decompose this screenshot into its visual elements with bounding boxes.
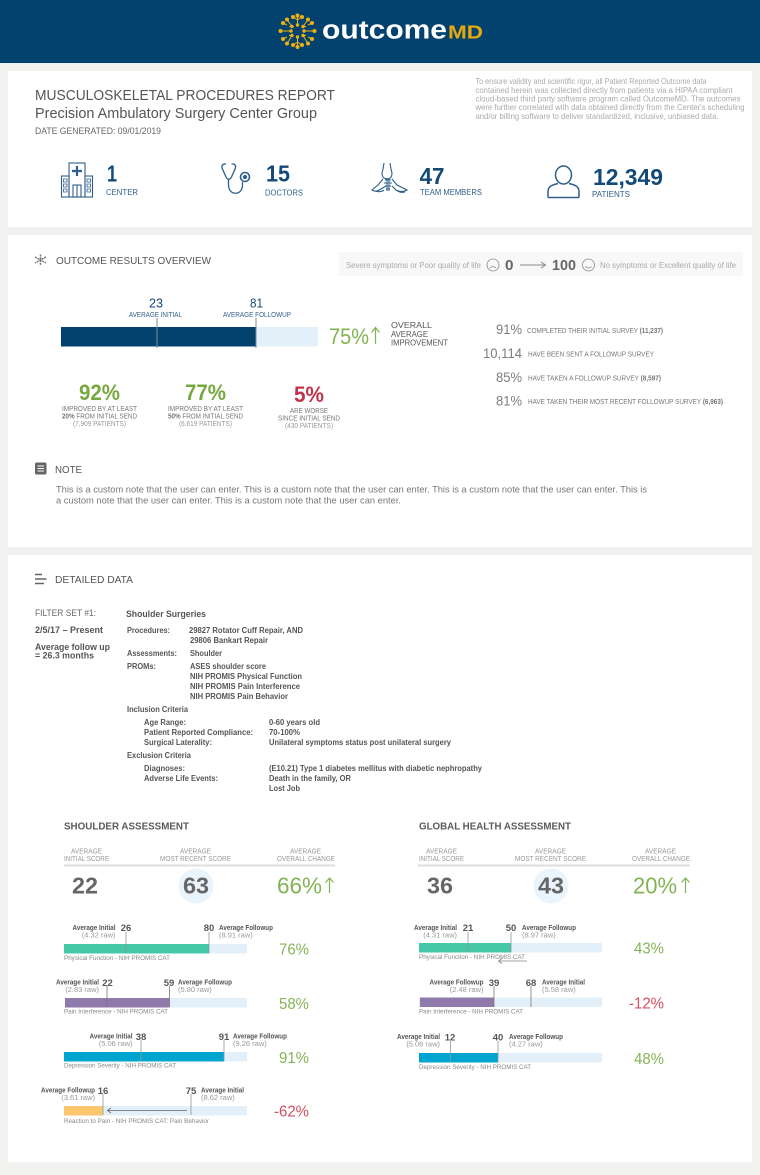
bar: shoulder depression severity: Depression Severity - NIH PROMIS CAT xyxy=(64,1062,176,1070)
bar: global depression severity: 48% xyxy=(634,1051,664,1068)
global health assessment summary: MOST RECENT SCORE xyxy=(515,856,586,863)
logo wordmark: MD xyxy=(448,22,483,42)
filter set summary: 2/5/17 – Present xyxy=(35,625,104,636)
survey statistics: HAVE BEEN SENT A FOLLOWUP SURVEY xyxy=(528,352,654,358)
bar: shoulder depression severity: Average Initial xyxy=(90,1034,133,1040)
global health assessment summary: 36 xyxy=(427,872,453,898)
stat: 5 percent worse xyxy=(278,382,340,430)
bar: shoulder depression severity: (9.26 raw) xyxy=(233,1039,267,1048)
stat: 92 percent improved: (7,909 PATIENTS) xyxy=(73,421,126,428)
bar: shoulder reaction to pain xyxy=(41,1086,309,1125)
logo icon: gold radial network xyxy=(279,14,316,48)
bar: shoulder depression severity: Average Followup xyxy=(233,1034,287,1040)
overall progress bar: 81 xyxy=(250,296,263,310)
survey statistics: HAVE TAKEN A FOLLOWUP SURVEY (8,597) xyxy=(528,376,661,382)
bar: global physical function: (8.97 raw) xyxy=(522,930,556,940)
filter details: 0-60 years old xyxy=(269,718,320,727)
scale legend: No symptoms or Excellent quality of life xyxy=(600,260,736,270)
global health assessment summary: OVERALL CHANGE xyxy=(632,856,690,863)
survey statistics: 81% xyxy=(496,392,522,408)
filter details: Unilateral symptoms status post unilateral surgery xyxy=(269,738,452,747)
bar: shoulder pain interference: Average Initial xyxy=(56,980,99,986)
filter details: Patient Reported Compliance: xyxy=(144,728,253,737)
bar: shoulder reaction to pain: (3.61 raw) xyxy=(61,1093,95,1102)
validity disclaimer: To ensure validity and scientific rigor, all Patient Reported Outcome data xyxy=(476,76,707,86)
bar: global physical function xyxy=(414,923,664,964)
bar: shoulder physical function: 26 xyxy=(121,923,131,934)
bar: shoulder depression severity: 91% xyxy=(279,1050,309,1067)
shoulder assessment summary: SHOULDER ASSESSMENT xyxy=(64,820,190,832)
icon: hospital xyxy=(62,163,92,197)
filter details: Surgical Laterality: xyxy=(144,738,212,747)
overall improvement: IMPROVEMENT xyxy=(391,338,448,348)
survey statistics xyxy=(483,321,723,408)
shoulder assessment summary: 22 xyxy=(72,872,98,898)
filter set summary: = 26.3 months xyxy=(35,650,94,662)
shoulder assessment summary: AVERAGE xyxy=(290,848,321,856)
filter details: ASES shoulder score xyxy=(190,662,267,671)
bar: global depression severity: (5.06 raw) xyxy=(406,1040,440,1048)
bar: global physical function: Physical Function - NIH PROMIS CAT xyxy=(419,954,525,961)
report title: MUSCULOSKELETAL PROCEDURES REPORT xyxy=(35,87,335,104)
shoulder assessment summary: INITIAL SCORE xyxy=(64,856,109,863)
validity disclaimer xyxy=(475,76,745,121)
global health assessment summary: AVERAGE xyxy=(426,848,457,856)
overall improvement: AVERAGE xyxy=(391,329,428,339)
report title: Precision Ambulatory Surgery Center Group xyxy=(35,105,317,122)
bar: shoulder reaction to pain: Average Followup xyxy=(41,1088,95,1094)
icon: list xyxy=(35,574,46,584)
overall progress bar: 23 xyxy=(149,296,163,310)
bar: shoulder physical function: (8.91 raw) xyxy=(219,930,253,940)
filter details: Assessments: xyxy=(127,649,177,658)
global health assessment summary: 20% xyxy=(633,872,677,898)
overall improvement: 75% xyxy=(329,324,369,349)
scale legend: Severe symptoms or Poor quality of life xyxy=(346,260,481,270)
filter details: Diagnoses: xyxy=(144,764,185,773)
icon: team hands xyxy=(372,163,407,192)
bar: shoulder pain interference: (5.80 raw) xyxy=(178,985,212,994)
bar: global pain interference: (2.48 raw) xyxy=(450,985,484,994)
scale legend: 100 xyxy=(552,258,576,274)
bar: global depression severity: Depression Severity - NIH PROMIS CAT xyxy=(419,1064,531,1071)
bar: global physical function: Average Followup xyxy=(522,925,576,932)
note text: a custom note that the user can enter. This is a custom note that the user can enter. xyxy=(56,496,401,506)
note text: This is a custom note that the user can enter. This is a custom note that the user can enter. This is a custom note that the user can enter. This is xyxy=(56,484,647,496)
survey statistics: HAVE TAKEN THEIR MOST RECENT FOLLOWUP SURVEY (6,963) xyxy=(528,399,723,406)
shoulder assessment summary: AVERAGE xyxy=(71,848,102,856)
shoulder assessment summary: MOST RECENT SCORE xyxy=(160,856,231,863)
bar: global physical function: 50 xyxy=(506,923,516,934)
filter details: NIH PROMIS Pain Interference xyxy=(190,682,301,691)
filter details: Lost Job xyxy=(269,784,300,793)
bar: shoulder pain interference xyxy=(56,978,309,1016)
stat: 77 percent improved: IMPROVED BY AT LEAST xyxy=(168,406,244,413)
bar: shoulder depression severity: 91 xyxy=(219,1032,230,1043)
stat: 92 percent improved: IMPROVED BY AT LEAST xyxy=(62,406,138,413)
filter details: Shoulder xyxy=(190,649,222,658)
global health assessment summary: AVERAGE xyxy=(535,848,566,856)
stat: centers xyxy=(106,160,138,197)
stat: team members: TEAM MEMBERS xyxy=(420,188,482,197)
icon: note xyxy=(35,462,46,474)
bar: global pain interference xyxy=(419,978,664,1016)
bar: global pain interference: -12% xyxy=(629,996,664,1012)
stat: doctors: 15 xyxy=(266,160,290,186)
bar: shoulder depression severity xyxy=(64,1032,309,1070)
heading: detailed data: DETAILED DATA xyxy=(55,574,133,586)
panel: report summary xyxy=(8,71,752,227)
stat: centers: 1 xyxy=(107,160,117,186)
validity disclaimer: contained herein was collected directly from patients via a HIPAA compliant xyxy=(476,85,733,95)
stat: patients: 12,349 xyxy=(593,164,663,190)
filter details: NIH PROMIS Physical Function xyxy=(190,672,302,681)
shoulder assessment summary: 63 xyxy=(183,872,209,898)
bar: shoulder pain interference: 22 xyxy=(102,978,113,989)
filter details: Exclusion Criteria xyxy=(127,751,192,760)
stat: doctors: DOCTORS xyxy=(265,188,303,198)
bar: shoulder pain interference: 59 xyxy=(164,978,174,989)
survey statistics: 10,114 xyxy=(483,345,522,361)
bar: shoulder physical function xyxy=(64,923,309,962)
filter details: Inclusion Criteria xyxy=(127,705,189,714)
heading: outcome results overview: OUTCOME RESULTS OVERVIEW xyxy=(56,255,211,267)
stat: 77 percent improved xyxy=(168,380,244,428)
stat: 92 percent improved: 20% FROM INITIAL SEND xyxy=(62,414,137,420)
stat: team members xyxy=(420,163,482,197)
bar: shoulder physical function: 80 xyxy=(204,923,214,934)
report title xyxy=(35,87,335,136)
stat: 92 percent improved: 92% xyxy=(79,380,120,405)
note text xyxy=(56,484,647,506)
filter details: Adverse Life Events: xyxy=(144,774,218,783)
logo wordmark: outcome xyxy=(322,16,447,44)
validity disclaimer: and/or billing software to deliver standardized, inclusive, unbiased data. xyxy=(476,111,718,121)
header banner xyxy=(0,0,760,63)
overall progress bar xyxy=(61,296,318,348)
scale legend: 0 xyxy=(505,258,514,274)
bar: global physical function: 21 xyxy=(463,923,474,934)
overall progress bar: AVERAGE INITIAL xyxy=(129,312,182,319)
filter details: PROMs: xyxy=(127,662,156,671)
stat: patients: PATIENTS xyxy=(592,190,630,199)
bar: shoulder reaction to pain: Reaction to Pain - NIH PROMIS CAT: Pain Behavior xyxy=(64,1118,210,1125)
filter details: (E10.21) Type 1 diabetes mellitus with diabetic nephropathy xyxy=(269,764,483,773)
survey statistics: 85% xyxy=(496,369,522,385)
filter set summary: Average follow up xyxy=(35,642,110,653)
survey statistics: COMPLETED THEIR INITIAL SURVEY (11,237) xyxy=(527,328,663,335)
stat: 5 percent worse: SINCE INITIAL SEND xyxy=(278,416,340,422)
filter details: 29827 Rotator Cuff Repair, AND xyxy=(189,626,303,635)
bar: global pain interference: Average Initial xyxy=(542,980,585,986)
bar: shoulder reaction to pain: -62% xyxy=(274,1104,309,1120)
global health assessment summary: AVERAGE xyxy=(645,848,676,856)
overall improvement xyxy=(329,320,448,349)
bar: global pain interference: 68 xyxy=(526,978,536,989)
icon: stethoscope xyxy=(222,164,250,193)
report title: DATE GENERATED: 09/01/2019 xyxy=(35,126,161,136)
logo wordmark xyxy=(322,16,483,44)
filter details: Death in the family, OR xyxy=(269,774,351,783)
filter details: 29806 Bankart Repair xyxy=(190,636,268,645)
bar: global pain interference: 39 xyxy=(489,978,499,989)
survey statistics: 91% xyxy=(496,321,522,337)
filter details: Shoulder Surgeries xyxy=(126,609,206,620)
bar: shoulder physical function: Average Followup xyxy=(219,925,273,932)
global health assessment summary: 43 xyxy=(538,872,564,898)
shoulder assessment summary: 66% xyxy=(277,872,322,898)
bar: shoulder depression severity: 38 xyxy=(136,1032,146,1043)
bar: shoulder physical function: Physical Function - NIH PROMIS CAT xyxy=(64,955,170,962)
global health assessment summary xyxy=(418,820,690,904)
bar: shoulder pain interference: Average Followup xyxy=(178,980,232,986)
bar: shoulder reaction to pain: 75 xyxy=(186,1086,197,1097)
bar: global pain interference: (5.58 raw) xyxy=(542,985,576,994)
filter details: Procedures: xyxy=(127,626,170,635)
bar: global depression severity: 12 xyxy=(445,1032,455,1044)
global health assessment summary: INITIAL SCORE xyxy=(419,856,464,863)
bar: shoulder physical function: Average Initial xyxy=(72,925,116,932)
stat: 92 percent improved xyxy=(62,380,138,428)
bar: shoulder reaction to pain: Average Initial xyxy=(201,1088,244,1094)
filter details xyxy=(126,609,483,793)
bar: global depression severity: 40 xyxy=(493,1032,503,1044)
stat: doctors xyxy=(265,160,303,198)
bar: global depression severity xyxy=(397,1032,664,1071)
stat: team members: 47 xyxy=(420,163,444,189)
global health assessment summary: GLOBAL HEALTH ASSESSMENT xyxy=(419,820,572,832)
filter set summary: FILTER SET #1: xyxy=(35,608,96,618)
bar: shoulder reaction to pain: 16 xyxy=(98,1086,108,1097)
bar: global pain interference: Pain Interference - NIH PROMIS CAT xyxy=(419,1008,523,1016)
stat: 77 percent improved: 50% FROM INITIAL SEND xyxy=(168,414,243,420)
shoulder assessment summary xyxy=(64,820,335,904)
bar: global physical function: (4.31 raw) xyxy=(423,930,457,940)
stat: centers: CENTER xyxy=(106,188,138,197)
bar: shoulder physical function: (4.32 raw) xyxy=(82,930,116,940)
bar: shoulder pain interference: 58% xyxy=(279,996,309,1013)
bar: shoulder pain interference: Pain Interference - NIH PROMIS CAT xyxy=(64,1008,168,1016)
filter set summary xyxy=(35,608,110,662)
filter details: 70-100% xyxy=(269,728,300,737)
validity disclaimer: cloud-based third party software program called OutcomeMD. The outcomes xyxy=(476,94,740,104)
stat: 5 percent worse: 5% xyxy=(294,382,324,407)
filter details: NIH PROMIS Pain Behavior xyxy=(190,692,288,701)
shoulder assessment summary: OVERALL CHANGE xyxy=(277,856,335,863)
panel: outcome results overview xyxy=(8,235,752,547)
stat: 5 percent worse: ARE WORSE xyxy=(290,408,328,415)
bar: global physical function: 43% xyxy=(634,940,664,958)
bar: global depression severity: (4.27 raw) xyxy=(509,1040,543,1048)
icon: patient xyxy=(548,166,579,198)
bar: global pain interference: Average Followup xyxy=(430,980,484,986)
stat: 77 percent improved: 77% xyxy=(185,380,226,405)
bar: shoulder pain interference: (2.83 raw) xyxy=(65,985,99,994)
bar: global depression severity: Average Initial xyxy=(397,1034,440,1041)
stat: 77 percent improved: (6,619 PATIENTS) xyxy=(179,421,232,428)
overall progress bar: AVERAGE FOLLOWUP xyxy=(223,312,291,319)
bar: shoulder physical function: 76% xyxy=(279,942,309,958)
heading: note: NOTE xyxy=(55,464,82,476)
bar: shoulder reaction to pain: (8.62 raw) xyxy=(201,1093,235,1102)
bar: global depression severity: Average Followup xyxy=(509,1034,563,1041)
bar: shoulder depression severity: (5.06 raw) xyxy=(99,1039,133,1048)
stat: 5 percent worse: (430 PATIENTS) xyxy=(285,423,333,430)
scale legend xyxy=(339,252,743,276)
icon: asterisk xyxy=(35,254,46,266)
filter details: Age Range: xyxy=(144,718,186,727)
bar: global physical function: Average Initial xyxy=(414,925,457,932)
panel: detailed data xyxy=(8,555,752,1162)
shoulder assessment summary: AVERAGE xyxy=(180,848,211,856)
overall improvement: OVERALL xyxy=(391,320,432,330)
